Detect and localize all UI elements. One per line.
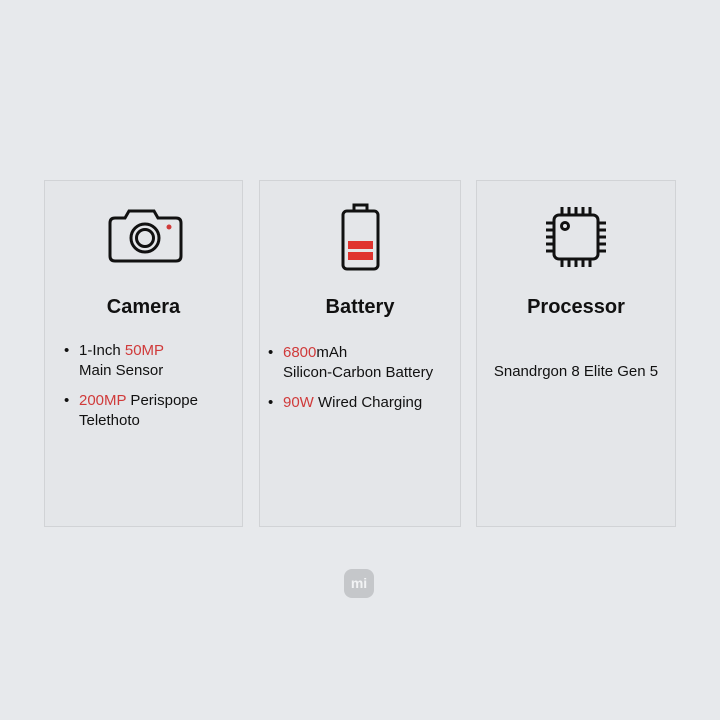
panel: camera (44, 180, 243, 527)
heading: processor: Processor (527, 296, 625, 318)
text block: battery specs: Silicon-Carbon Battery (283, 364, 433, 381)
panel: battery (259, 180, 461, 527)
panel: processor (476, 180, 676, 527)
text block: camera specs (64, 342, 198, 429)
text block: battery specs: 6800mAh (283, 344, 347, 361)
logo: mi: mi (351, 575, 367, 591)
logo: mi (344, 569, 374, 598)
text block: camera specs: 1-Inch 50MP (79, 342, 164, 359)
icon: battery (342, 204, 380, 270)
icon: chip (546, 207, 606, 267)
text block: battery specs (268, 344, 434, 411)
text block: camera specs: Telethoto (79, 412, 140, 429)
heading: battery: Battery (326, 296, 394, 318)
heading: camera: Camera (107, 296, 180, 318)
icon: camera (108, 210, 182, 262)
text block: camera specs: 200MP Perispope (79, 392, 198, 409)
text block: processor spec: Snandrgon 8 Elite Gen 5 (494, 363, 658, 380)
text block: camera specs: Main Sensor (79, 362, 163, 379)
text block: battery specs: 90W Wired Charging (283, 394, 422, 411)
